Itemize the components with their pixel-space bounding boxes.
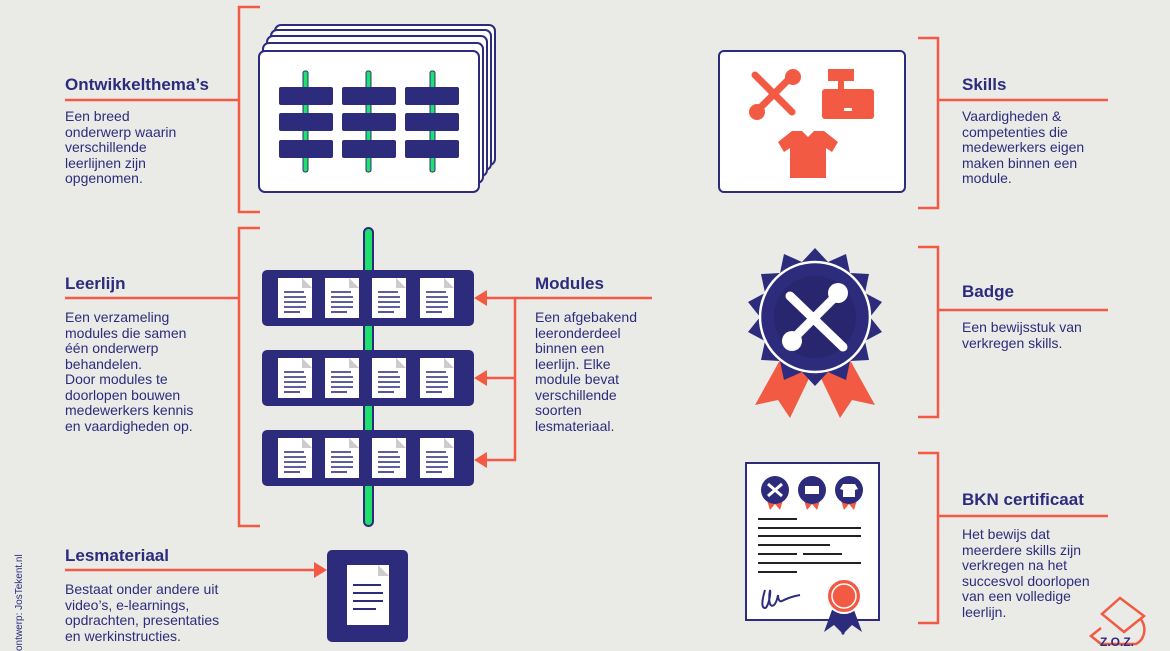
text: ontwikkelthema [65, 108, 176, 186]
text: modules: verschillende [535, 386, 617, 402]
text: certificaat: succesvol doorlopen [962, 572, 1090, 588]
text: ontwikkelthema: onderwerp waarin [65, 124, 176, 140]
icon: leerlijn modules [262, 228, 474, 526]
text: ontwikkelthema: Een breed [65, 108, 130, 124]
heading: Leerlijn: Leerlijn [65, 274, 125, 293]
text: skills: medewerkers eigen [962, 139, 1084, 155]
text: leerlijn: modules die samen [65, 324, 186, 340]
heading: Badge: Badge [962, 282, 1014, 301]
text: modules: Een afgebakend [535, 309, 637, 325]
text: lesmateriaal: en werkinstructies. [65, 628, 181, 644]
text: leerlijn: behandelen. [65, 356, 142, 372]
text: badge: Een bewijsstuk van [962, 319, 1082, 335]
text: certificaat [962, 526, 1090, 620]
text: badge: verkregen skills. [962, 334, 1062, 350]
icon: lesmateriaal [327, 550, 408, 642]
text: skills [962, 108, 1084, 186]
text: skills: competenties die [962, 124, 1068, 140]
text: modules: lesmateriaal. [535, 418, 614, 434]
icon: badge [748, 248, 882, 418]
text: modules: binnen een [535, 340, 604, 356]
text: modules: soorten [535, 402, 582, 418]
credit: ontwerp: JosTekent.nl [14, 554, 25, 651]
icon: z.o.z. [1091, 598, 1144, 649]
icon: certificaat [746, 463, 879, 635]
icon: skills box [719, 51, 905, 192]
text: ontwikkelthema: opgenomen. [65, 170, 143, 186]
text: certificaat: Het bewijs dat [962, 526, 1050, 542]
text: leerlijn: één onderwerp [65, 340, 158, 356]
icon: z.o.z.: Z.O.Z. [1100, 635, 1134, 649]
text: certificaat: leerlijn. [962, 604, 1006, 620]
text: leerlijn: Een verzameling [65, 309, 169, 325]
heading: Ontwikkelthema's: Ontwikkelthema’s [65, 75, 209, 94]
heading: Lesmateriaal: Lesmateriaal [65, 546, 169, 565]
text: certificaat: van een volledige [962, 588, 1071, 604]
text: skills: module. [962, 170, 1012, 186]
text: modules [535, 309, 637, 434]
text: leerlijn: doorlopen bouwen [65, 386, 180, 402]
text: ontwikkelthema: leerlijnen zijn [65, 154, 146, 170]
text: badge [962, 319, 1082, 351]
heading: Modules: Modules [535, 274, 604, 293]
text: skills: maken binnen een [962, 154, 1077, 170]
text: modules: leerlijn. Elke [535, 356, 610, 372]
text: modules: module bevat [535, 371, 619, 387]
text: lesmateriaal: opdrachten, presentaties [65, 612, 219, 628]
text: certificaat: verkregen na het [962, 557, 1067, 573]
heading: BKN certificaat: BKN certificaat [962, 490, 1084, 509]
text: lesmateriaal: Bestaat onder andere uit [65, 581, 218, 597]
text: leerlijn: en vaardigheden op. [65, 418, 193, 434]
heading: Skills: Skills [962, 75, 1006, 94]
text: leerlijn [65, 309, 193, 434]
text: lesmateriaal [65, 581, 219, 644]
icon: ontwikkelthema stack [259, 25, 495, 192]
text: certificaat: meerdere skills zijn [962, 542, 1081, 558]
text: ontwikkelthema: verschillende [65, 139, 147, 155]
text: lesmateriaal: video’s, e-learnings, [65, 596, 189, 612]
text: modules: leeronderdeel [535, 324, 621, 340]
text: leerlijn: medewerkers kennis [65, 402, 193, 418]
text: leerlijn: Door modules te [65, 371, 168, 387]
text: skills: Vaardigheden & [962, 108, 1061, 124]
